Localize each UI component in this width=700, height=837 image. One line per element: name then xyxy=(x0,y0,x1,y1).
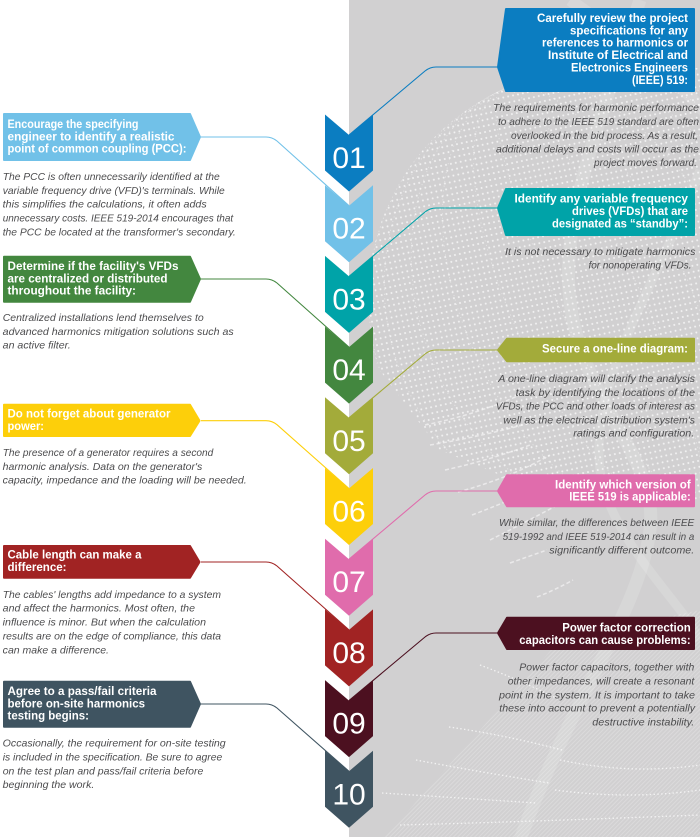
chevron 07: 07 xyxy=(332,566,366,599)
chevron 01 xyxy=(325,114,373,192)
heading box 09 xyxy=(498,618,694,649)
body text 01: overlooked in the bid process. As a result, xyxy=(511,130,698,142)
body text 02: the PCC be located at the transformer's secondary. xyxy=(3,226,236,238)
heading 03: designated as “standby”: xyxy=(552,218,688,230)
step 04 xyxy=(3,257,373,404)
heading 09: Power factor correction xyxy=(562,622,691,634)
body text 08: and affect the harmonics. Most often, the xyxy=(3,603,195,615)
leader line 02 xyxy=(201,137,349,206)
body text 02: this simplifies the calculations, it often adds xyxy=(3,199,207,211)
body text 02 xyxy=(3,171,236,238)
body text 09 xyxy=(498,662,696,728)
chevron 08 xyxy=(325,609,373,686)
step 02 xyxy=(3,114,373,262)
leader line 01 xyxy=(349,67,497,135)
chevron 06: 06 xyxy=(332,496,366,528)
body text 03: It is not necessary to mitigate harmonics xyxy=(505,246,696,258)
chevron 02 xyxy=(325,185,373,262)
body text 09: other impedances, will create a resonant xyxy=(508,675,695,687)
body text 09: Power factor capacitors, together with xyxy=(519,662,694,674)
heading 09 xyxy=(519,622,691,647)
heading box 10 xyxy=(4,682,200,727)
body text 10: on the test plan and pass/fail criteria before xyxy=(3,765,203,777)
body text 02: variable frequency drive (VFD)'s terminals. While xyxy=(3,185,225,197)
body text 10: is included in the specification. Be sure to agree xyxy=(3,752,222,764)
body text 08: influence is minor. But when the calculation xyxy=(3,617,206,629)
step 03 xyxy=(325,189,696,333)
heading 01: (IEEE) 519: xyxy=(632,75,688,87)
body text 06 xyxy=(3,447,247,486)
heading box 04 xyxy=(4,257,200,302)
heading 09: capacitors can cause problems: xyxy=(519,635,691,647)
body text 01: project moves forward. xyxy=(593,157,697,169)
heading 04 xyxy=(8,261,178,298)
body text 05 xyxy=(496,373,696,440)
body text 08 xyxy=(3,589,221,656)
body text 04: advanced harmonics mitigation solutions such as xyxy=(3,326,234,338)
body text 09: these into account to prevent a potentially xyxy=(499,703,696,715)
heading 02: engineer to identify a realistic xyxy=(8,132,175,144)
heading 01: specifications for any xyxy=(570,26,689,38)
background: grey panel with dotted globe xyxy=(349,0,700,837)
body text 02: The PCC is often unnecessarily identified at the xyxy=(3,171,220,183)
leader line 05 xyxy=(349,350,497,418)
step 08 xyxy=(3,546,373,686)
body text 05: ratings and configuration. xyxy=(573,428,694,440)
chevron 05 xyxy=(325,397,373,474)
heading 02: Encourage the specifying xyxy=(8,119,138,131)
step 09 xyxy=(325,618,696,757)
leader line 08 xyxy=(201,562,349,630)
chevron 07 xyxy=(325,539,373,616)
chevron 06 xyxy=(325,468,373,545)
heading 01 xyxy=(537,13,689,87)
leader line 03 xyxy=(349,208,497,276)
body text 01: The requirements for harmonic performance xyxy=(493,102,699,114)
heading 10: Agree to a pass/fail criteria xyxy=(8,686,157,698)
heading 06 xyxy=(8,408,171,433)
body text 04: an active filter. xyxy=(3,340,71,352)
heading 01: Institute of Electrical and xyxy=(548,50,688,62)
body text 10 xyxy=(3,738,226,791)
heading 03 xyxy=(514,194,689,230)
chevron 08: 08 xyxy=(332,637,366,670)
heading box 08 xyxy=(4,546,200,578)
body text 08: The cables' lengths add impedance to a system xyxy=(3,589,221,601)
chevron 09 xyxy=(325,680,373,757)
heading 06: Do not forget about generator xyxy=(8,408,171,420)
heading 10: before on-site harmonics xyxy=(8,698,145,710)
step 06 xyxy=(3,405,373,545)
leader line 10 xyxy=(201,704,349,771)
body text 03 xyxy=(505,246,696,272)
heading 10: testing begins: xyxy=(8,711,89,723)
leader line 04 xyxy=(201,279,349,347)
heading 03: drives (VFDs) that are xyxy=(572,206,688,218)
heading 01: Carefully review the project xyxy=(537,13,688,25)
body text 07: significantly different outcome. xyxy=(549,544,694,556)
leader line 06 xyxy=(201,421,349,488)
heading 01: Electronics Engineers xyxy=(571,62,688,74)
chevron 01: 01 xyxy=(332,142,366,175)
step 01 xyxy=(325,9,699,192)
heading 08: Cable length can make a xyxy=(8,550,142,562)
heading 07: Identify which version of xyxy=(555,479,691,491)
body text 01: additional delays and costs will occur as the xyxy=(496,144,699,156)
heading box 03 xyxy=(498,189,694,235)
heading box 01 xyxy=(498,9,694,91)
body text 06: capacity, impedance and the loading will be needed. xyxy=(3,474,247,486)
body text 04 xyxy=(3,312,234,352)
body text 06: harmonic analysis. Data on the generator's xyxy=(3,461,203,473)
heading 10 xyxy=(8,686,157,723)
heading box 02 xyxy=(4,114,200,160)
heading 08 xyxy=(8,550,142,574)
heading 04: are centralized or distributed xyxy=(8,273,168,285)
chevron 05: 05 xyxy=(332,425,366,458)
body text 08: can make a difference. xyxy=(3,644,109,656)
body text 02: unnecessary costs. IEEE 519-2014 encourages that xyxy=(3,213,234,225)
body text 10: beginning the work. xyxy=(3,779,94,791)
chevron 10: 10 xyxy=(332,778,366,811)
heading 03: Identify any variable frequency xyxy=(514,194,689,206)
body text 09: destructive instability. xyxy=(592,716,694,728)
step 07 xyxy=(325,475,695,616)
body text 08: results are on the edge of compliance, this data xyxy=(3,630,221,642)
chevron 04: 04 xyxy=(332,354,366,387)
heading 04: throughout the facility: xyxy=(8,286,136,298)
step 10 xyxy=(3,682,373,828)
body text 05: VFDs, the PCC and other loads of interest as xyxy=(496,401,696,413)
chevron 04 xyxy=(325,327,373,404)
chevron 10 xyxy=(325,751,373,828)
heading 02 xyxy=(8,119,186,156)
body text 03: for nonoperating VFDs. xyxy=(588,260,692,272)
heading 01: references to harmonics or xyxy=(542,38,689,50)
heading 04: Determine if the facility's VFDs xyxy=(8,261,178,273)
body text 05: task by identifying the locations of the xyxy=(516,387,695,399)
chevron 03: 03 xyxy=(332,283,366,316)
body text 07: While similar, the differences between IEEE xyxy=(499,517,695,529)
heading 05: Secure a one-line diagram: xyxy=(542,344,688,356)
chevron 02: 02 xyxy=(332,213,366,246)
body text 01 xyxy=(493,102,699,169)
heading 08: difference: xyxy=(8,562,66,574)
heading box 07 xyxy=(498,475,694,506)
body text 09: point in the system. It is important to take xyxy=(498,689,695,701)
heading 07 xyxy=(555,479,691,504)
chevron 03 xyxy=(325,256,373,333)
leader line 09 xyxy=(349,633,497,701)
heading 07: IEEE 519 is applicable: xyxy=(569,492,691,504)
body text 05: well as the electrical distribution system's xyxy=(503,414,696,426)
leader line 07 xyxy=(349,491,497,559)
body text 04: Centralized installations lend themselves to xyxy=(3,312,204,324)
chevron 09: 09 xyxy=(332,708,366,741)
heading 06: power: xyxy=(8,421,44,433)
heading box 05 xyxy=(498,339,694,361)
body text 06: The presence of a generator requires a second xyxy=(3,447,214,459)
step 05 xyxy=(325,339,696,474)
body text 10: Occasionally, the requirement for on-site testing xyxy=(3,738,226,750)
body text 05: A one-line diagram will clarify the analysis xyxy=(497,373,696,385)
body text 07 xyxy=(499,517,695,556)
heading 02: point of common coupling (PCC): xyxy=(8,144,186,156)
heading box 06 xyxy=(4,405,200,436)
